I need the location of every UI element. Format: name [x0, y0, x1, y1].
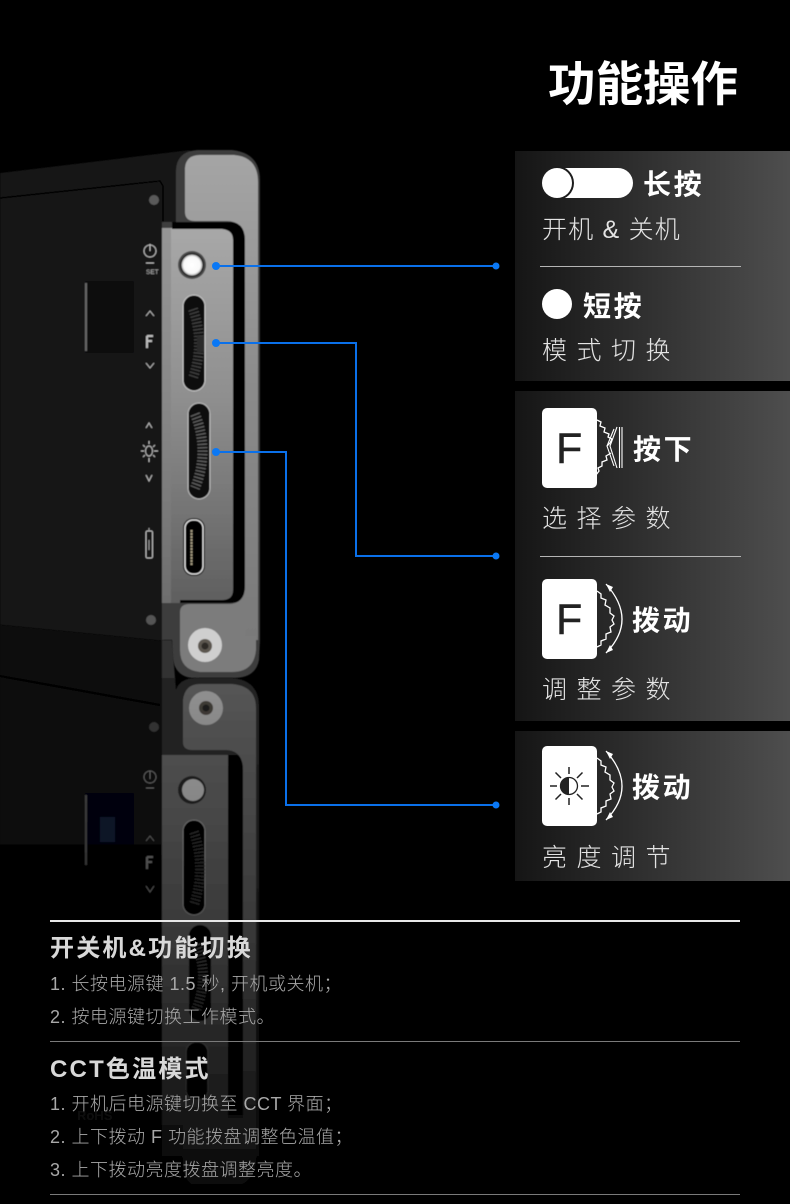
- reflected brightness dial: [189, 925, 211, 1021]
- heading: short press: 短按: [583, 291, 644, 322]
- small screen window: [85, 281, 134, 353]
- metal plate: [162, 228, 235, 603]
- device photo: upper unit: [0, 150, 260, 678]
- heading: scroll brightness: 拨动: [632, 772, 693, 803]
- small screw top: [149, 195, 159, 205]
- icon: F dial scroll: [542, 579, 622, 659]
- cap bevel and frame: [162, 150, 260, 678]
- top cap face: [185, 155, 258, 640]
- dark channel: [172, 222, 246, 603]
- title: 功能操作: [548, 59, 738, 112]
- reflected power button: [178, 776, 206, 804]
- device photo: lower reflected unit: [0, 625, 262, 1204]
- printed panel icons: [141, 244, 159, 558]
- reflected channel: [228, 755, 243, 1115]
- icon: F dial press: F: [556, 425, 582, 473]
- icon: short press dot: [542, 289, 572, 319]
- heading: long press: 长按: [643, 169, 704, 200]
- lower cap face with screw: [180, 586, 256, 672]
- printed panel icons: SET: [146, 269, 159, 276]
- step 3: 3. 上下拨动亮度拨盘调整亮度。: [50, 1160, 312, 1180]
- icon: F dial scroll: F: [556, 596, 582, 644]
- USB-C port: [183, 518, 205, 576]
- reflected F dial: [183, 820, 205, 915]
- reflected screen: [85, 793, 134, 870]
- small screw bottom: [146, 615, 156, 625]
- step 2: 2. 按电源键切换工作模式。: [50, 1007, 275, 1027]
- heading: CCT mode: CCT色温模式: [50, 1056, 211, 1083]
- reflected body: [0, 625, 162, 1160]
- icon: long press toggle: [540, 166, 633, 200]
- device body: [0, 150, 190, 641]
- text: brightness adjust: 亮度调节: [542, 844, 680, 872]
- F dial: [183, 295, 205, 391]
- text block: power and function switch: [50, 935, 342, 1027]
- callout: F dial line: [212, 339, 500, 560]
- reflected USB-C port: [186, 1042, 208, 1100]
- reflected regulatory marks: RoHS: [77, 1108, 113, 1123]
- text: adjust parameter: 调整参数: [542, 676, 680, 704]
- step 1: 1. 长按电源键 1.5 秒, 开机或关机；: [50, 974, 342, 994]
- reflected plate: [162, 755, 228, 1125]
- callout: brightness dial line: [212, 448, 500, 808]
- text: mode switch: 模式切换: [542, 337, 680, 365]
- reflected panel icons: [144, 771, 156, 892]
- brightness dial: [188, 403, 210, 499]
- panel: power button: [515, 151, 790, 381]
- panel: brightness dial: [515, 731, 790, 881]
- reflection fade overlay: [0, 678, 262, 1204]
- icon: F dial press: [542, 408, 622, 488]
- text: power on and off: 开机 & 关机: [542, 216, 681, 244]
- panel: F dial: [515, 391, 790, 721]
- heading: press: 按下: [633, 434, 694, 465]
- text: select parameter: 选择参数: [542, 505, 680, 533]
- reflected small screw: [149, 722, 159, 732]
- callout: power button line: [212, 262, 500, 270]
- reflected cap face: [183, 684, 256, 1188]
- step 2: 2. 上下拨动 F 功能拨盘调整色温值；: [50, 1127, 353, 1147]
- step 1: 1. 开机后电源键切换至 CCT 界面；: [50, 1094, 343, 1114]
- power button: [178, 251, 206, 279]
- reflected frame: [162, 640, 259, 1196]
- icon: brightness scroll: [542, 746, 622, 826]
- heading: scroll: 拨动: [632, 605, 693, 636]
- heading: power and function switch: 开关机&功能切换: [50, 935, 253, 962]
- text block: CCT mode: [50, 1056, 353, 1180]
- reflected screw: [189, 691, 223, 725]
